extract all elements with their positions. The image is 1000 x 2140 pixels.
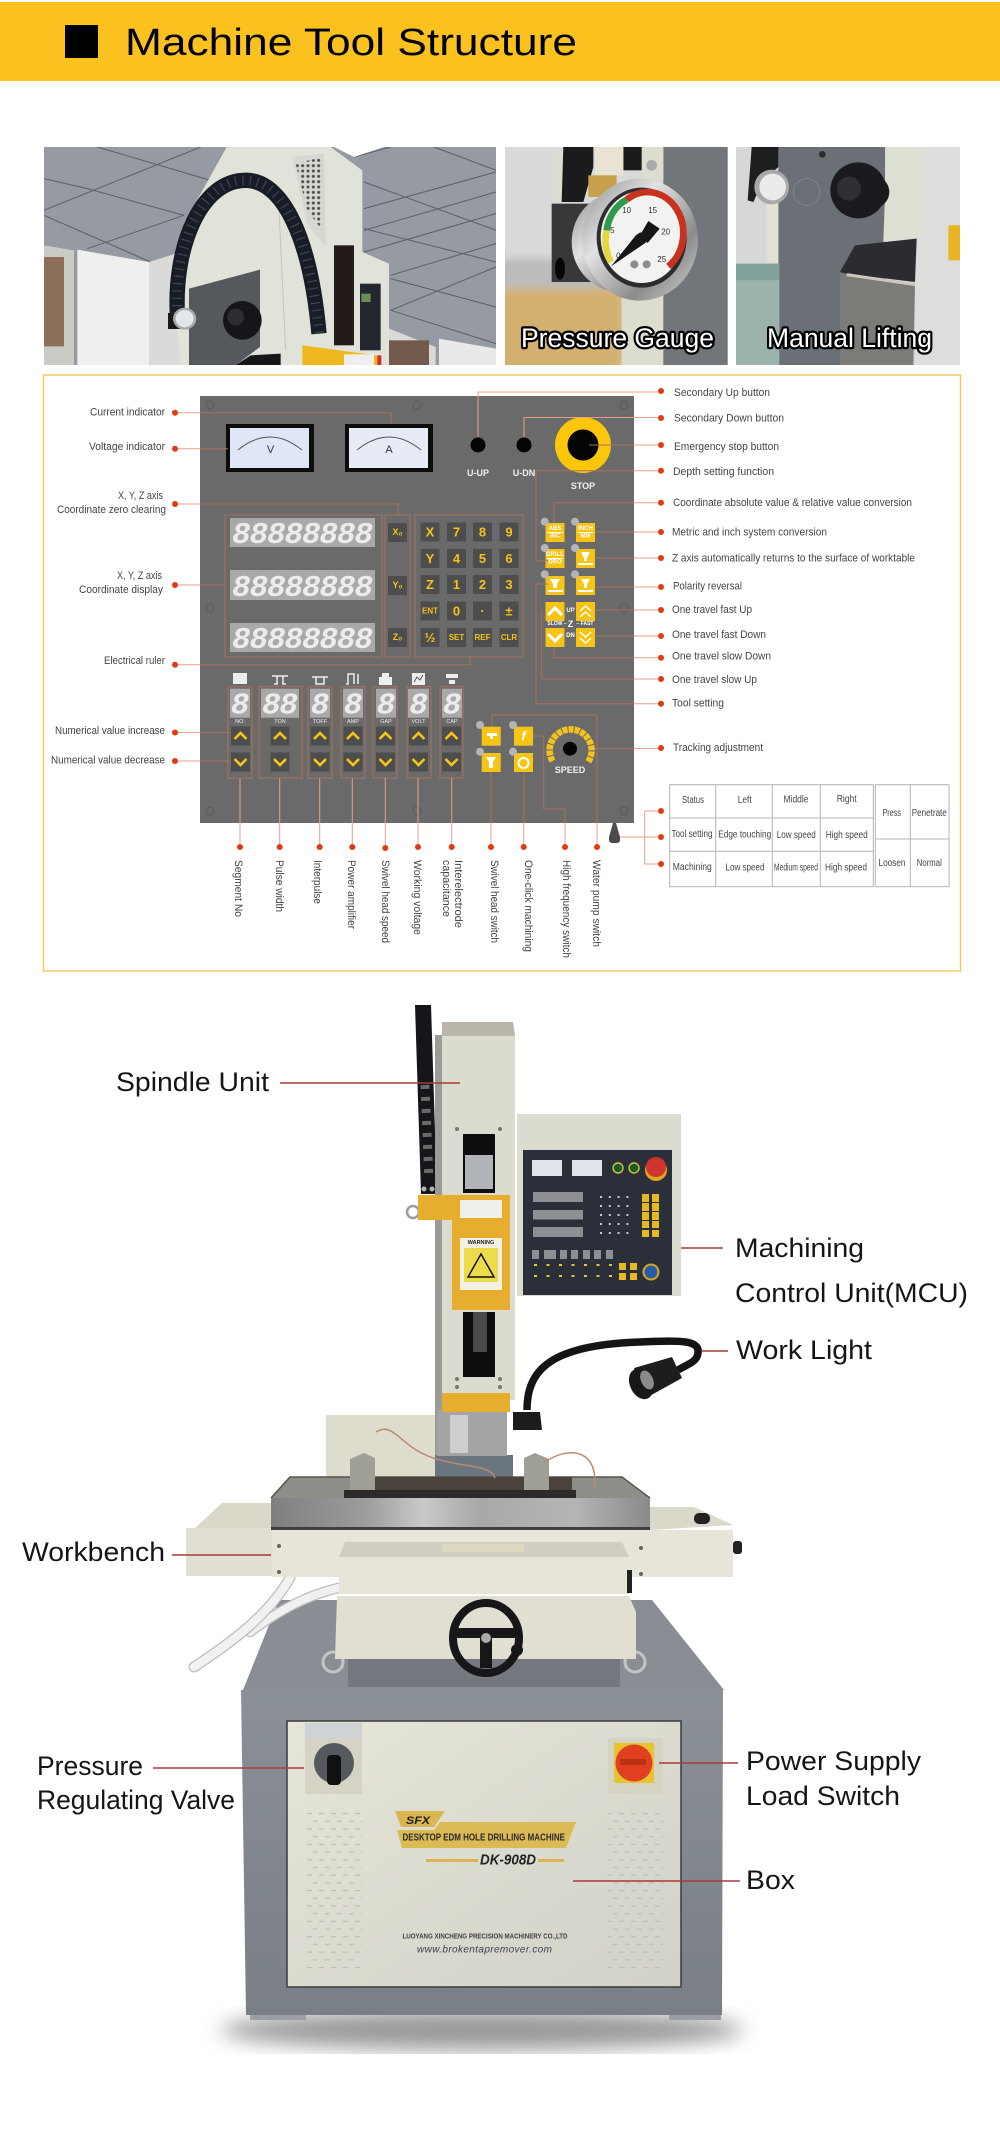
column: Segment No: 8 bbox=[231, 688, 249, 724]
label: coordinate zero clearing: X, Y, Z axis bbox=[118, 490, 163, 502]
header banner bbox=[0, 2, 1000, 81]
photo: pressure gauge: 20 bbox=[661, 227, 671, 236]
yellow spindle guard: WARNING bbox=[468, 1240, 494, 1246]
brand plate: www.brokentapremover.com bbox=[417, 1944, 552, 1956]
keypad: 9 bbox=[505, 524, 513, 540]
callout: Work Light: Work Light bbox=[736, 1335, 873, 1365]
table: press / loosen: Penetrate bbox=[912, 808, 947, 819]
yellow function buttons: MM bbox=[580, 534, 590, 540]
U-DN button: U-DN bbox=[513, 468, 535, 478]
table: press / loosen: Normal bbox=[917, 858, 942, 869]
table: press / loosen: Press bbox=[882, 808, 901, 819]
label: Current indicator: Current indicator bbox=[90, 407, 165, 419]
label: High frequency switch: f bbox=[521, 728, 527, 744]
saddle and box bbox=[335, 1542, 636, 1687]
workbench beam bbox=[186, 1503, 742, 1577]
label: coordinate zero clearing bbox=[57, 490, 178, 516]
yellow function buttons: Z bbox=[568, 619, 574, 629]
cabinet front bbox=[241, 1690, 723, 2020]
table: status speeds: High speed bbox=[826, 830, 868, 841]
axis zero keys: X₀ bbox=[392, 527, 403, 537]
column: Power amplifier: Power amplifier bbox=[345, 860, 357, 929]
work light bbox=[513, 1341, 698, 1430]
leader lines on panel bbox=[178, 392, 658, 864]
lower collar and bag bbox=[435, 1393, 513, 1480]
table: status speeds: Low speed bbox=[777, 830, 816, 841]
coordinate displays: 88888888 bbox=[232, 571, 373, 606]
brand plate bbox=[395, 1811, 576, 1956]
label: coordinate zero clearing: Coordinate zero clearing bbox=[57, 504, 166, 516]
U-UP button bbox=[467, 438, 489, 478]
column: Interpulse: Interpulse bbox=[311, 860, 323, 904]
callout: Pressure Regulating Valve: Regulating Valve bbox=[37, 1785, 235, 1815]
column: Interelectrode capacitance bbox=[440, 674, 464, 928]
label: Swivel head switch bbox=[476, 721, 501, 943]
brand plate: SFX bbox=[406, 1815, 431, 1827]
cable chain bbox=[415, 1005, 437, 1194]
photo: pressure gauge: 10 bbox=[622, 206, 632, 215]
table: status speeds: Machining bbox=[673, 862, 712, 873]
keypad: 7 bbox=[453, 524, 460, 540]
column: Interelectrode capacitance: 8 bbox=[443, 688, 461, 724]
axis zero keys: Y₀ bbox=[392, 580, 403, 590]
keypad: ½ bbox=[425, 630, 436, 645]
table: status speeds bbox=[670, 785, 873, 887]
keypad: SET bbox=[449, 633, 464, 642]
keypad: REF bbox=[474, 633, 491, 642]
label: coordinate display: Coordinate display bbox=[79, 584, 163, 596]
photo: pressure gauge bbox=[495, 147, 728, 375]
stop button: STOP bbox=[571, 481, 595, 491]
coordinate displays bbox=[225, 515, 382, 658]
keypad: 8 bbox=[479, 524, 486, 540]
callout: Machining Control Unit bbox=[681, 1233, 968, 1308]
label: Emergency stop button: Emergency stop button bbox=[674, 441, 779, 453]
column: Interelectrode capacitance: capacitance bbox=[440, 860, 452, 917]
callout: Machining Control Unit: Control Unit(MCU) bbox=[735, 1278, 968, 1308]
column: Swivel head speed bbox=[373, 673, 397, 943]
label: Secondary Up button: Secondary Up button bbox=[674, 387, 770, 399]
table: press / loosen: Loosen bbox=[878, 858, 906, 869]
column: Interelectrode capacitance: CAP bbox=[446, 719, 458, 725]
label: Z axis returns to worktable surface: Z axis automatically returns to the surface of worktable bbox=[672, 553, 915, 565]
table dots bbox=[658, 808, 664, 867]
callout: Pressure Regulating Valve: Pressure bbox=[37, 1751, 143, 1781]
column: Pulse width: TON bbox=[274, 719, 286, 725]
keypad: 2 bbox=[479, 577, 486, 592]
hoses bbox=[194, 1578, 338, 1667]
title: Machine Tool Structure bbox=[125, 22, 577, 64]
label: coordinate display: X, Y, Z axis bbox=[117, 570, 162, 582]
photo: manual lifting bbox=[736, 147, 960, 365]
label: Water pump switch: Water pump switch bbox=[590, 860, 602, 947]
speed dial: SPEED bbox=[555, 765, 586, 775]
yellow function buttons: INC bbox=[550, 534, 561, 540]
label: Electrical ruler: Electrical ruler bbox=[104, 655, 165, 667]
callout: Power Supply Load Switch: Power Supply bbox=[746, 1746, 922, 1776]
photo: pressure gauge: 25 bbox=[657, 255, 667, 264]
label: One travel fast Down: One travel fast Down bbox=[672, 629, 766, 641]
table: status speeds: Edge touching bbox=[718, 830, 771, 840]
keypad: Z bbox=[426, 577, 434, 592]
brand plate: DK-908D bbox=[480, 1852, 536, 1868]
icon: water pump lever bbox=[609, 823, 620, 843]
label: One-click machining: One-click machining bbox=[522, 860, 534, 952]
eye bolts bbox=[323, 1652, 645, 1672]
column strip bbox=[435, 1035, 443, 1480]
table: status speeds: Status bbox=[682, 795, 704, 806]
yellow function buttons: – FAST bbox=[577, 621, 593, 627]
machine illustration bbox=[186, 1005, 744, 2050]
column: Swivel head speed: GAP bbox=[380, 719, 392, 725]
table: status speeds: Medium speed bbox=[774, 862, 818, 874]
keypad: · bbox=[480, 604, 485, 618]
column: Working voltage bbox=[407, 673, 431, 935]
column: Interpulse bbox=[308, 677, 332, 904]
label: Tracking adjustment: Tracking adjustment bbox=[673, 742, 763, 754]
yellow function buttons: DN bbox=[566, 633, 575, 639]
callout: Machining Control Unit: Machining bbox=[735, 1233, 864, 1263]
table: status speeds: Left bbox=[738, 795, 752, 806]
column: Swivel head speed: 8 bbox=[377, 688, 395, 724]
column: Segment No bbox=[228, 673, 252, 917]
column: Pulse width: 88 bbox=[262, 688, 298, 724]
keypad: CLR bbox=[501, 633, 517, 642]
current meter: A bbox=[385, 444, 393, 456]
label: One travel slow Up: One travel slow Up bbox=[672, 674, 757, 686]
column: Working voltage: Working voltage bbox=[411, 860, 423, 935]
coordinate displays: 88888888 bbox=[232, 518, 373, 553]
control panel face bbox=[200, 396, 634, 823]
cabinet shadow bbox=[220, 2010, 744, 2050]
work tray bbox=[271, 1429, 650, 1530]
table: status speeds: Middle bbox=[784, 794, 809, 806]
label: Polarity reversal: Polarity reversal bbox=[673, 581, 742, 593]
keypad: 4 bbox=[453, 551, 461, 566]
cabinet top bbox=[243, 1600, 724, 1690]
column: Interelectrode capacitance: Interelectrode bbox=[452, 860, 464, 928]
keypad: 5 bbox=[479, 551, 486, 566]
panel: control panel diagram bbox=[44, 375, 960, 971]
label: One travel slow Down: One travel slow Down bbox=[672, 651, 771, 663]
photo: pressure gauge: 5 bbox=[610, 226, 615, 235]
U-DN button bbox=[513, 438, 535, 478]
icon: black square bbox=[65, 25, 98, 58]
brand plate: LUOYANG XINCHENG PRECISION MACHINERY CO.,LTD bbox=[402, 1932, 568, 1940]
callout: Power Supply Load Switch bbox=[659, 1746, 922, 1811]
coordinate displays: 88888888 bbox=[232, 623, 373, 658]
photo caption: Pressure Gauge bbox=[521, 323, 714, 353]
column: Pulse width bbox=[259, 676, 302, 912]
photo: pressure gauge: 15 bbox=[648, 206, 658, 215]
yellow function buttons: UP bbox=[566, 608, 575, 614]
table: status speeds: High speed bbox=[825, 862, 867, 874]
column: Segment No: NO. bbox=[235, 719, 245, 725]
label: Coordinate absolute value conversion: Coordinate absolute value & relative value conversion bbox=[673, 497, 912, 509]
photo caption: Manual Lifting bbox=[767, 323, 932, 353]
label: Numerical value decrease: Numerical value decrease bbox=[51, 755, 165, 767]
keypad: ± bbox=[505, 604, 513, 618]
yellow spindle guard bbox=[407, 1195, 510, 1310]
label: Secondary Down button: Secondary Down button bbox=[674, 412, 784, 424]
yellow function buttons: DRO bbox=[548, 560, 562, 566]
label: One travel fast Up: One travel fast Up bbox=[672, 604, 752, 616]
callout: Power Supply Load Switch: Load Switch bbox=[746, 1781, 900, 1811]
label: Metric and inch system conversion: Metric and inch system conversion bbox=[672, 527, 827, 539]
column: Swivel head speed: Swivel head speed bbox=[379, 860, 391, 943]
keypad: ENT bbox=[422, 606, 438, 616]
label: One-click machining bbox=[509, 748, 534, 952]
column: Segment No: Segment No bbox=[232, 860, 244, 917]
label: Swivel head switch: Swivel head switch bbox=[488, 860, 500, 943]
table: status speeds: Tool setting bbox=[672, 829, 712, 840]
keypad: X bbox=[426, 524, 435, 540]
MCU box bbox=[517, 1114, 681, 1296]
cabinet door bbox=[287, 1721, 681, 1987]
keypad: 0 bbox=[453, 604, 460, 618]
column: Power amplifier: 8 bbox=[344, 688, 362, 724]
brand plate: DESKTOP EDM HOLE DRILLING MACHINE bbox=[402, 1832, 565, 1844]
keypad: Y bbox=[426, 551, 435, 566]
yellow function buttons: INCH bbox=[578, 526, 593, 532]
table: status speeds: Right bbox=[837, 794, 857, 805]
column: Interpulse: TOFF bbox=[313, 719, 328, 725]
label: Depth setting function: Depth setting function bbox=[673, 466, 774, 478]
label: High frequency switch: High frequency switch bbox=[560, 860, 572, 958]
photo: pressure gauge: 0 bbox=[616, 252, 621, 261]
label: Voltage indicator: Voltage indicator bbox=[89, 441, 165, 453]
back housing bbox=[326, 1415, 436, 1477]
column: Pulse width: Pulse width bbox=[273, 860, 285, 912]
table: press / loosen bbox=[875, 785, 949, 887]
voltage meter bbox=[226, 424, 314, 472]
U-UP button: U-UP bbox=[467, 468, 489, 478]
label: Tool setting: Tool setting bbox=[672, 698, 724, 710]
yellow function buttons: SLOW – bbox=[547, 621, 567, 627]
label: Numerical value increase: Numerical value increase bbox=[55, 725, 165, 737]
yellow function buttons bbox=[541, 518, 595, 647]
table: status speeds: Low speed bbox=[726, 862, 764, 874]
column: Working voltage: 8 bbox=[409, 688, 428, 724]
column: Power amplifier bbox=[341, 674, 365, 929]
label: High frequency switch bbox=[509, 721, 572, 958]
keypad: 6 bbox=[505, 551, 513, 566]
spindle column bbox=[442, 1022, 515, 1400]
keypad: 1 bbox=[453, 577, 460, 592]
power switch bbox=[608, 1738, 663, 1794]
handwheel bbox=[453, 1603, 523, 1673]
current meter bbox=[345, 424, 433, 472]
callout: Spindle Unit: Spindle Unit bbox=[116, 1067, 270, 1097]
axis zero keys: Z₀ bbox=[393, 632, 402, 642]
callout: Box: Box bbox=[746, 1865, 796, 1895]
voltage meter: V bbox=[267, 444, 275, 456]
column: Working voltage: VOLT bbox=[412, 719, 426, 725]
column: Power amplifier: AMP bbox=[347, 719, 359, 725]
yellow function buttons: ABS bbox=[549, 526, 561, 532]
keypad bbox=[415, 515, 523, 657]
label: coordinate display bbox=[79, 570, 178, 596]
keypad: 3 bbox=[505, 577, 513, 592]
yellow function buttons: DRILL bbox=[546, 552, 564, 558]
pressure valve bbox=[305, 1723, 362, 1794]
callout: Pressure Regulating Valve bbox=[37, 1751, 304, 1815]
axis zero keys bbox=[385, 515, 410, 657]
callout: Workbench: Workbench bbox=[22, 1537, 165, 1567]
photo: cable chain on column bbox=[44, 147, 496, 365]
stop button bbox=[555, 417, 611, 491]
column: Interpulse: 8 bbox=[311, 688, 329, 724]
speed dial bbox=[550, 729, 592, 775]
